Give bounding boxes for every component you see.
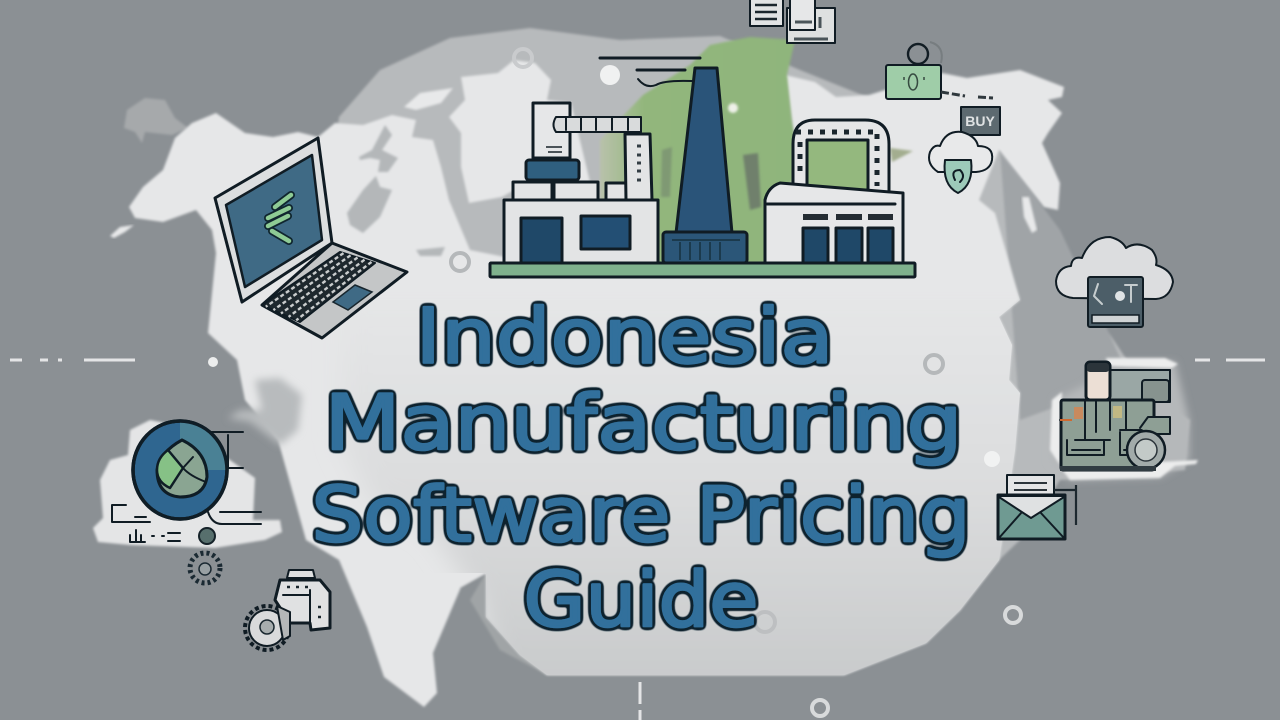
title: Guide — [524, 555, 758, 644]
title: Manufacturing — [324, 378, 962, 467]
icon: envelope — [998, 475, 1076, 539]
soft lower map shading — [364, 297, 1020, 674]
title: Software Pricing — [312, 470, 970, 559]
title — [312, 292, 970, 644]
left and central land mass — [129, 70, 1064, 707]
icon: money note — [886, 42, 993, 99]
machine backing highlights — [1050, 358, 1198, 480]
pie ring — [133, 421, 227, 519]
icon: cloud with database — [1056, 237, 1173, 327]
land top centre — [449, 60, 590, 203]
machine backing — [1050, 362, 1189, 480]
pie line details — [112, 432, 261, 542]
lower gray swirl — [228, 378, 302, 445]
icon: top documents — [750, 0, 835, 43]
sliver island — [110, 225, 134, 238]
left building — [504, 103, 658, 263]
icon: buy sign and cloud shield: BUY — [965, 113, 995, 129]
right building — [765, 120, 903, 263]
dashed axes — [10, 360, 1265, 720]
panel: left pie icon cluster — [93, 420, 282, 548]
cloud behind pie — [93, 420, 282, 548]
chimney — [600, 58, 747, 263]
island top — [404, 88, 453, 110]
pie leaf — [157, 440, 207, 497]
icon: small gear — [190, 553, 220, 583]
globe ocean — [300, 28, 1190, 675]
blurred gray blob top left — [124, 98, 188, 143]
icon: buy sign and cloud shield — [929, 107, 1000, 193]
decorative rings and dots — [208, 49, 1021, 716]
small dot gear — [199, 528, 215, 544]
title: Indonesia — [416, 292, 834, 380]
ground bar — [490, 263, 915, 277]
icon: machinery panel — [1050, 358, 1198, 480]
factory illustration — [490, 58, 915, 277]
green backdrop — [600, 37, 800, 263]
inland sea — [347, 125, 445, 256]
icon: laptop — [215, 138, 407, 338]
green patch shadows — [661, 103, 913, 210]
icon: laptop rupee symbol — [268, 195, 291, 241]
sliver island right — [1022, 197, 1037, 233]
icon: gear and machine — [245, 570, 330, 650]
